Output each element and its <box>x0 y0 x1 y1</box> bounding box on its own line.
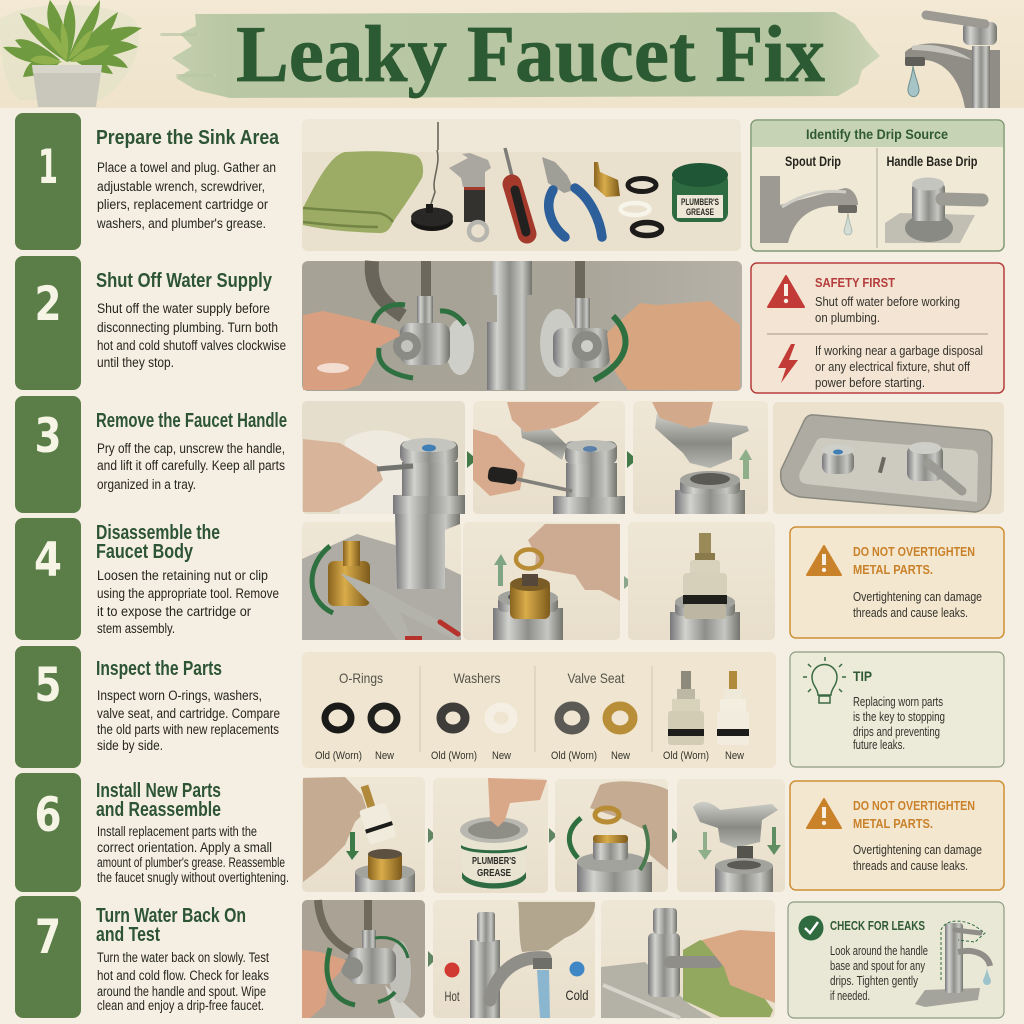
step 1 heading: Prepare the Sink Area <box>96 127 280 149</box>
step 2 body: disconnecting plumbing. Turn both <box>97 320 278 335</box>
photo: prying off cap <box>302 401 465 514</box>
step 4 heading: Disassemble the <box>96 522 220 544</box>
panel: parts comparison: New <box>611 750 630 762</box>
step number 7 <box>15 896 81 1018</box>
panel: parts comparison: New <box>492 750 511 762</box>
header band <box>0 0 1024 108</box>
step 2 body <box>97 301 286 370</box>
step 3 body: organized in a tray. <box>97 477 196 492</box>
panel: check for leaks: drips. Tighten gently <box>830 974 919 988</box>
icon: potted plant <box>0 0 142 107</box>
hot label: Hot <box>444 988 460 1004</box>
panel: identify the drip source: Spout Drip <box>785 153 841 169</box>
photo: reassembling handle <box>677 779 785 892</box>
icon: warning triangle <box>807 546 841 575</box>
row 4 <box>15 514 1004 652</box>
step number 2 <box>15 256 81 390</box>
photo: tools and supplies: PLUMBER'S <box>681 197 719 207</box>
panel: safety first: on plumbing. <box>815 311 880 325</box>
arrow: step 6 b <box>549 828 557 843</box>
illustration: handle base drip <box>885 178 982 243</box>
panel: do not overtighten warning: METAL PARTS. <box>853 562 933 577</box>
panel: parts comparison: Old (Worn) <box>431 750 477 762</box>
arrow: step 3 a <box>467 451 477 468</box>
step 7 heading <box>96 905 246 946</box>
step 2 body: Shut off the water supply before <box>97 301 270 316</box>
step 5 body: side by side. <box>97 738 163 753</box>
panel: check for leaks <box>788 902 1004 1018</box>
photo: tools and supplies: GREASE <box>686 207 714 217</box>
step 4 body <box>97 568 279 636</box>
panel: parts comparison: Old (Worn) <box>315 750 362 762</box>
photo: lifting handle off <box>633 401 768 514</box>
arrow: step 4 a <box>624 576 632 589</box>
panel: parts comparison: New <box>725 750 744 762</box>
photo: testing hot and cold water <box>433 900 595 1018</box>
row 1 <box>15 113 1004 251</box>
step number 1 <box>15 113 81 250</box>
panel: check for leaks: Look around the handle <box>830 944 928 958</box>
step 5 body: Inspect worn O-rings, washers, <box>97 688 262 703</box>
panel: safety first: If working near a garbage disposal <box>815 344 983 358</box>
photo: installing cartridge <box>302 777 425 892</box>
step number 5 <box>15 646 81 768</box>
step 5 body: the old parts with new replacements <box>97 722 279 737</box>
step number 3: 3 <box>34 409 62 464</box>
step number 5: 5 <box>34 658 62 713</box>
photo: turning water back on <box>302 900 425 1018</box>
panel: identify the drip source <box>751 120 1004 251</box>
step number 6 <box>15 773 81 892</box>
step 6 body: amount of plumber's grease. Reassemble <box>97 855 285 870</box>
photo: tools and supplies <box>302 119 741 251</box>
title brush stroke <box>160 12 880 98</box>
panel: parts comparison <box>302 652 776 768</box>
panel: check for leaks: base and spout for any <box>830 959 926 973</box>
photo: plumber's grease jar: PLUMBER'S <box>472 856 516 867</box>
step 6 heading: Install New Parts <box>96 780 221 802</box>
icon: dripping faucet <box>905 15 1000 108</box>
step 7 body <box>97 950 269 1013</box>
panel: parts comparison: Washers <box>454 670 500 686</box>
step 5 body: valve seat, and cartridge. Compare <box>97 706 280 721</box>
step 3 body: Pry off the cap, unscrew the handle, <box>97 441 285 456</box>
step 1 body: pliers, replacement cartridge or <box>97 197 268 212</box>
panel: tip <box>790 652 1004 767</box>
photo: plumber's grease jar: GREASE <box>477 868 511 879</box>
step number 3 <box>15 396 81 513</box>
panel: parts comparison: Valve Seat <box>568 670 625 686</box>
panel: check for leaks: CHECK FOR LEAKS <box>830 918 925 933</box>
cold label: Cold <box>566 987 588 1003</box>
photo: exposed cartridge <box>628 522 775 652</box>
panel: safety first: or any electrical fixture, shut off <box>815 360 970 374</box>
photo: wiping the faucet clean <box>601 900 775 1018</box>
panel: tip: future leaks. <box>853 738 905 752</box>
step 6 body: Install replacement parts with the <box>97 824 257 839</box>
photo: threading retaining nut <box>555 779 668 892</box>
step 6 body: correct orientation. Apply a small <box>97 840 272 855</box>
row 3 <box>15 396 1004 514</box>
step 7 body: hot and cold flow. Check for leaks <box>97 968 269 983</box>
panel: safety first: power before starting. <box>815 376 925 390</box>
step 7 body: around the handle and spout. Wipe <box>97 984 266 999</box>
icon: lightning bolt <box>778 344 798 383</box>
cold label <box>566 962 588 1003</box>
title: Leaky Faucet Fix <box>236 9 825 99</box>
panel: do not overtighten warning: DO NOT OVERTIGHTEN <box>853 798 975 813</box>
hot label <box>444 962 460 1004</box>
step number 7: 7 <box>35 910 61 965</box>
step 2 body: hot and cold shutoff valves clockwise <box>97 338 286 353</box>
step number 1: 1 <box>38 140 58 195</box>
panel: identify the drip source: Handle Base Drip <box>886 153 978 169</box>
panel: do not overtighten warning: Overtightening can damage <box>853 590 982 604</box>
illustration: spout drip <box>760 176 858 243</box>
step 1 body: adjustable wrench, screwdriver, <box>97 179 265 194</box>
panel: do not overtighten warning: DO NOT OVERTIGHTEN <box>853 544 975 559</box>
step 4 body: using the appropriate tool. Remove <box>97 586 279 601</box>
panel: do not overtighten warning <box>790 527 1004 638</box>
step number 2: 2 <box>34 277 62 332</box>
photo: parts tray <box>773 402 1004 514</box>
panel: safety first: SAFETY FIRST <box>815 275 895 290</box>
panel: tip: TIP <box>853 668 872 684</box>
panel: do not overtighten warning: Overtightening can damage <box>853 843 982 857</box>
cartridges <box>668 671 749 745</box>
photo: unscrewing handle <box>473 401 625 514</box>
step 6 heading <box>96 780 221 821</box>
panel: parts comparison: Old (Worn) <box>663 750 709 762</box>
step 1 body <box>96 160 276 231</box>
step 4 heading <box>96 522 220 563</box>
panel: identify the drip source: Identify the Drip Source <box>806 126 948 142</box>
icon: light bulb <box>803 657 846 703</box>
panel: safety first <box>751 263 1004 393</box>
step 2 body: until they stop. <box>97 355 174 370</box>
illustration: faucet with leak points <box>915 921 991 1007</box>
step 5 heading: Inspect the Parts <box>96 658 222 680</box>
valve seats <box>559 706 633 730</box>
photo: hands turning shutoff valves <box>302 261 742 391</box>
panel: do not overtighten warning: threads and cause leaks. <box>853 859 968 873</box>
step number 4 <box>15 518 81 640</box>
arrow: step 7 a <box>428 951 436 967</box>
step 5 body <box>97 688 280 753</box>
arrow: step 6 c <box>672 828 679 843</box>
row 2 <box>15 256 1004 393</box>
photo: loosening retaining nut <box>302 514 461 640</box>
panel: check for leaks: if needed. <box>830 989 870 1003</box>
step 3 body: and lift it off carefully. Keep all parts <box>97 458 285 473</box>
step 3 heading: Remove the Faucet Handle <box>96 410 287 432</box>
row 6 <box>15 773 1004 893</box>
step 4 body: it to expose the cartridge or <box>97 604 251 619</box>
icon: warning triangle <box>807 799 841 828</box>
photo: plumber's grease jar <box>433 778 548 893</box>
panel: do not overtighten warning: threads and cause leaks. <box>853 606 968 620</box>
photo: lifting retaining ring <box>463 522 620 648</box>
panel: parts comparison: O-Rings <box>339 670 383 686</box>
o-rings <box>325 706 397 730</box>
step 4 heading: Faucet Body <box>96 541 194 563</box>
step 6 body <box>97 824 289 885</box>
panel: parts comparison: Old (Worn) <box>551 750 597 762</box>
row 7 <box>15 896 1004 1018</box>
panel: safety first: Shut off water before working <box>815 295 960 309</box>
panel: tip: is the key to stopping <box>853 710 945 724</box>
step number 4: 4 <box>34 533 62 588</box>
arrow: step 3 b <box>627 451 637 468</box>
step 7 heading: and Test <box>96 924 160 946</box>
panel: tip: drips and preventing <box>853 725 940 739</box>
step 7 body: clean and enjoy a drip-free faucet. <box>97 998 264 1013</box>
panel: parts comparison: New <box>375 750 394 762</box>
icon: check mark <box>798 916 824 940</box>
pot <box>32 65 102 107</box>
panel: do not overtighten warning <box>790 781 1004 890</box>
panel: tip: Replacing worn parts <box>853 695 943 709</box>
step 1 body: Place a towel and plug. Gather an <box>97 160 276 175</box>
step 4 body: Loosen the retaining nut or clip <box>97 568 268 583</box>
step 1 body: washers, and plumber's grease. <box>96 216 266 231</box>
step 2 heading: Shut Off Water Supply <box>96 270 273 292</box>
step 6 heading: and Reassemble <box>96 799 221 821</box>
washers <box>441 707 513 729</box>
step 6 body: the faucet snugly without overtightening. <box>97 870 289 885</box>
step 3 body <box>97 441 285 492</box>
icon: warning triangle <box>768 276 804 307</box>
arrow: step 6 a <box>428 828 436 843</box>
step 7 body: Turn the water back on slowly. Test <box>97 950 269 965</box>
panel: do not overtighten warning: METAL PARTS. <box>853 816 933 831</box>
step number 6: 6 <box>34 788 62 843</box>
step 7 heading: Turn Water Back On <box>96 905 246 927</box>
row 5 <box>15 646 1004 768</box>
step 4 body: stem assembly. <box>97 621 175 636</box>
